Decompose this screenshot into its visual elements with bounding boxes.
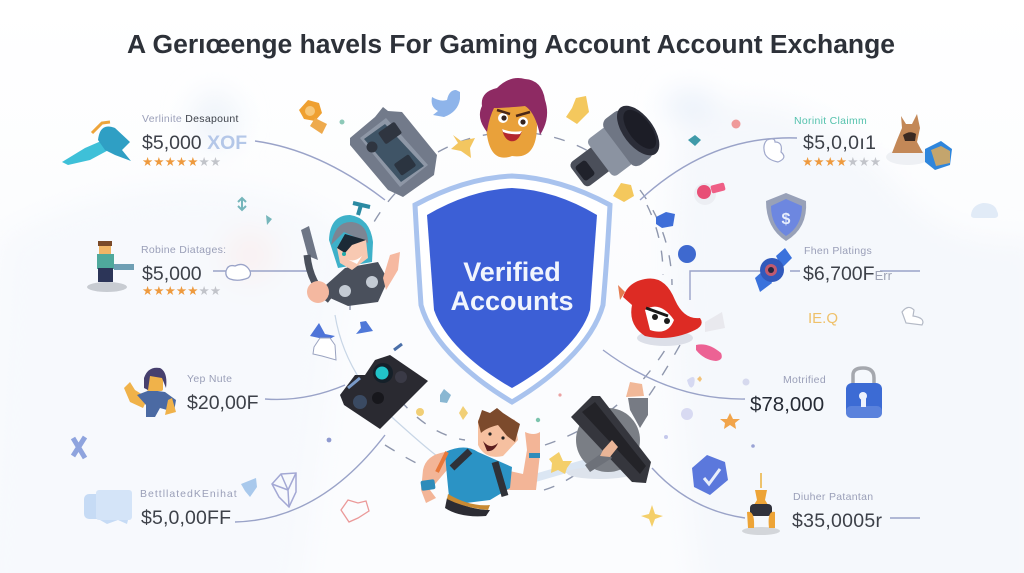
item label: Diuher Patantan — [793, 491, 873, 503]
icon: camera lens — [560, 98, 668, 199]
icon: black action camera — [340, 344, 428, 429]
icon: blue candy — [755, 248, 792, 292]
social bird icon — [432, 90, 460, 117]
item price: $5,000 — [142, 263, 202, 285]
icon: blue creature with board — [62, 122, 131, 165]
item label: Motrified — [783, 374, 826, 386]
gold medal icon — [299, 100, 327, 134]
icon: outline cloud — [764, 139, 784, 162]
teal diamond icon — [688, 135, 701, 146]
rating stars: ★★★★★★★ — [142, 283, 221, 298]
icon: outline gem shield — [272, 473, 296, 507]
rating stars: ★★★★★★★ — [802, 154, 881, 169]
icon: red creature — [618, 278, 725, 346]
item price: $5,0,0ı1 — [803, 132, 876, 154]
item price: $78,000 — [750, 393, 824, 416]
scattered accent stars and dots — [238, 96, 755, 527]
icon: dollar shield — [766, 193, 806, 241]
shield label: Verified — [463, 257, 561, 287]
central shield — [415, 176, 610, 402]
icon: dollar shield: $ — [782, 211, 791, 228]
item price: $35,0005r — [792, 510, 882, 532]
icon: yellow robot — [742, 473, 780, 535]
icon: knight character — [301, 203, 400, 306]
item price: $5,0,00FF — [141, 507, 231, 529]
item label: Norinit Claimm — [794, 115, 867, 127]
connector lines — [213, 138, 920, 522]
middle-right item — [755, 193, 923, 327]
blue tag icon — [656, 212, 675, 228]
pale cloud icon — [971, 203, 998, 218]
item price: $5,000 XOF — [142, 132, 247, 154]
bottom-right item — [692, 455, 882, 535]
lower-left item — [124, 368, 259, 417]
item label: Robine Diatages: — [141, 244, 226, 256]
item label: Fhen Platings — [804, 245, 872, 257]
icon: pale chat cards — [84, 490, 132, 524]
icon: brown dog — [886, 114, 930, 165]
pink pill icon — [694, 182, 726, 205]
red outline cloud — [341, 500, 369, 522]
pink capsule icon — [696, 344, 722, 361]
outline shape with swirl — [313, 338, 336, 360]
item price: $20,00F — [187, 392, 259, 414]
icon: hero face — [480, 78, 547, 158]
item label: BettllatedKEnihat — [140, 488, 237, 500]
item label: Verlinite Desapount — [142, 113, 239, 125]
icon: dark gear with arm — [567, 382, 651, 483]
icon: outline cloud — [902, 307, 923, 325]
item label: Yep Nute — [187, 373, 232, 385]
icon: blue crate — [925, 141, 952, 170]
blue blob icon — [678, 245, 696, 263]
icon: blocky character — [87, 241, 134, 292]
icon: muscular character — [124, 368, 176, 417]
middle-left item — [87, 241, 250, 298]
item price: $6,700FErr — [803, 263, 893, 285]
icon: check badge — [692, 455, 728, 495]
rating stars: ★★★★★★★ — [142, 154, 221, 169]
lower-right item — [750, 368, 882, 418]
shield label second line: Accounts — [450, 286, 574, 316]
icon: blue blob — [241, 478, 257, 497]
icon: grey controller — [350, 107, 437, 197]
pale cross icon — [73, 437, 85, 458]
icon: outline cloud — [226, 264, 250, 280]
dashed orbit arcs — [335, 132, 680, 490]
blue blob marker — [356, 321, 373, 334]
bottom-left item — [84, 473, 296, 529]
icon: padlock — [846, 368, 882, 418]
top-left item — [62, 113, 247, 169]
small orange label: IE.Q — [808, 310, 838, 327]
top-right item — [764, 114, 952, 170]
title: A Gerıœenge havels For Gaming Account Account Exchange — [127, 31, 895, 59]
icon: smiling man — [420, 408, 540, 516]
